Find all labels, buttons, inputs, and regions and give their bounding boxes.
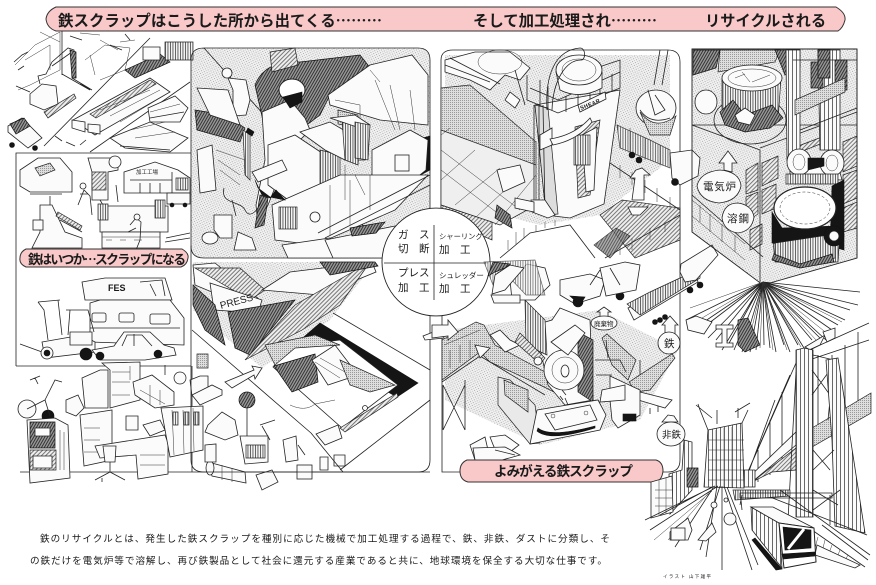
bubble: electric furnace — [697, 170, 741, 203]
press machine — [193, 263, 295, 355]
label: shearing: シャーリング — [439, 232, 483, 241]
icon: microwave and stereo — [165, 354, 222, 405]
label: shearing: 工 — [460, 244, 470, 256]
icon: excavator — [30, 48, 92, 118]
label: press — [398, 267, 430, 294]
machine blocks — [268, 115, 428, 245]
heading: processing: そして加工処理され⋯⋯⋯ — [473, 12, 657, 30]
description text — [30, 533, 610, 567]
window grid — [692, 112, 857, 282]
worker welding — [255, 79, 310, 228]
credit: イラスト 山下雄平 — [663, 573, 712, 580]
icon: refrigerator and washer — [82, 362, 140, 408]
road perspective — [645, 486, 758, 570]
furnace — [695, 65, 786, 144]
label: shredder: 加 — [439, 283, 450, 295]
label: shredder — [439, 270, 484, 295]
discharge base — [498, 377, 606, 444]
railway tracks — [770, 490, 870, 568]
icon: bending machine — [98, 200, 190, 250]
label: gas cutting: 断 — [419, 243, 430, 255]
panel: scrap sources scenes — [8, 31, 193, 152]
top cylinder with railing: SHEAR — [580, 98, 601, 112]
icon: drum and cans — [205, 420, 345, 490]
recycled car pile — [470, 435, 520, 462]
label: press: 加 — [398, 282, 408, 294]
panel hatching: left side equipment — [243, 130, 250, 180]
magnet crane — [636, 50, 676, 135]
panel: bridge and city — [645, 323, 871, 580]
building shading — [693, 50, 720, 75]
fan rays — [686, 282, 860, 352]
title banner — [46, 7, 845, 31]
bridge tower far — [813, 358, 865, 533]
bubble: iron: 鉄 — [664, 337, 675, 350]
icon: lockers — [161, 406, 203, 457]
bubble: non-ferrous — [657, 415, 685, 446]
panel: gas cutting illustration — [191, 48, 430, 258]
pit floor lines — [192, 313, 430, 472]
icon: forklift — [20, 300, 95, 360]
bubble: electric furnace: 電気炉 — [703, 180, 736, 193]
icon: machine tool — [20, 158, 82, 248]
dark tunnel arch — [255, 55, 372, 130]
electrode columns — [786, 49, 857, 258]
scrap yard floor grid — [441, 85, 536, 240]
bubble: molten steel — [722, 203, 754, 233]
press lid — [245, 262, 378, 360]
overhead gantry — [733, 490, 832, 525]
left buildings — [651, 440, 755, 518]
bubble: waste: 廃棄物 — [594, 319, 614, 328]
panel: manufacturing scrap box — [16, 153, 191, 366]
heading: recycled: リサイクルされる — [705, 13, 826, 30]
feed conveyor and supports — [442, 322, 560, 430]
tonal underlay for dense line work — [191, 48, 857, 445]
bridge deck — [743, 393, 871, 483]
icon: sedan — [92, 332, 176, 360]
icon: ship — [110, 96, 188, 152]
tall scaffolded building — [696, 403, 750, 488]
panel: electric furnace and ladle — [692, 49, 857, 285]
icon: press machine and workers — [78, 156, 121, 215]
sheared scrap pile — [594, 228, 630, 258]
icon: bicycle and scooter — [18, 376, 84, 422]
press machine: PRESS — [219, 292, 255, 312]
cut steel bale — [497, 165, 525, 192]
worker in background — [197, 68, 250, 125]
icon: minibus — [90, 300, 184, 345]
dismantling backdrop — [328, 55, 428, 125]
panel: household and office scrap — [18, 354, 430, 490]
oxygen cylinder and generator — [202, 188, 262, 250]
callout: iron becomes scrap: 鉄はいつか⋯スクラップになる — [28, 252, 186, 267]
icon: FES delivery truck — [82, 278, 172, 300]
train — [751, 507, 816, 570]
icon: train carriages — [72, 54, 170, 135]
icon: factory building — [124, 162, 190, 207]
panel: outer rounded frame — [191, 48, 680, 472]
label: gas cutting — [398, 229, 430, 255]
I-beam and H-beam ends — [686, 316, 835, 352]
bridge tower near — [788, 348, 834, 520]
icon: FES delivery truck: FES — [108, 283, 126, 293]
demolition wall sketches — [14, 32, 135, 92]
label: press: 工 — [419, 282, 430, 294]
panel: press illustration — [192, 262, 444, 472]
black pit shadow — [298, 323, 418, 397]
label: press: プレス — [398, 267, 430, 279]
arrow into shredder — [432, 320, 458, 340]
heading: scrap sources: 鉄スクラップはこうした所から出てくる⋯⋯⋯ — [58, 12, 382, 30]
ladle — [772, 180, 844, 268]
railings foreground — [500, 163, 680, 258]
icon: truck — [8, 118, 42, 150]
description text: の鉄だけを電気炉等で溶解し、再び鉄製品として社会に還元する産業であると共に、地球環境を保全する大切な仕事です。 — [30, 555, 607, 567]
suspension bridge cables — [743, 323, 869, 483]
label: shredder: 工 — [460, 283, 470, 295]
bubble: non-ferrous: 非鉄 — [662, 429, 682, 441]
shear feed arm — [445, 50, 530, 108]
icon: filing cabinet — [80, 410, 112, 466]
shredder unit — [515, 300, 593, 405]
central process diagram — [382, 208, 490, 316]
steel products fan — [686, 282, 860, 352]
top cylinder with railing — [527, 48, 620, 113]
sorting conveyors — [595, 334, 675, 428]
bubble: iron — [658, 316, 680, 354]
icon: office desk and chair — [95, 416, 168, 482]
panel: shearing illustration — [441, 48, 700, 258]
label: gas cutting: ス — [419, 229, 430, 241]
description text: 鉄のリサイクルとは、発生した鉄スクラップを種別に応じた機械で加工処理する過程で、鉄、非鉄、ダストに分類し、そ — [40, 533, 610, 545]
icon: vending machine — [27, 418, 70, 483]
panel: shredder illustration — [432, 245, 718, 462]
label: gas cutting: 切 — [398, 243, 408, 255]
gas torch — [252, 160, 287, 200]
label: shredder: シュレッダー — [439, 270, 484, 280]
icon: container — [143, 42, 193, 60]
label: shearing: 加 — [439, 244, 450, 256]
arrow to furnace — [719, 151, 737, 172]
icon: kitchen cabinet — [133, 375, 174, 408]
shear tower — [515, 90, 620, 218]
crushed car — [265, 335, 398, 432]
label: shearing — [439, 232, 483, 256]
bubble: molten steel: 溶鋼 — [727, 212, 749, 225]
icon: electric fan and heater — [205, 392, 268, 464]
ladle hook — [786, 149, 844, 184]
trailer with logs — [627, 245, 718, 324]
label: gas cutting: ガ — [398, 229, 408, 241]
icon: factory building: 加工工場 — [136, 168, 159, 176]
rail and steel beams — [282, 175, 430, 258]
trucks and excavator — [484, 260, 640, 307]
dump truck — [617, 125, 700, 186]
callout: scrap revived: よみがえる鉄スクラップ — [494, 463, 633, 479]
arrow into press — [225, 329, 444, 388]
bubble: waste — [591, 307, 617, 330]
callout: scrap revived — [460, 460, 663, 482]
cars on road — [670, 498, 736, 541]
